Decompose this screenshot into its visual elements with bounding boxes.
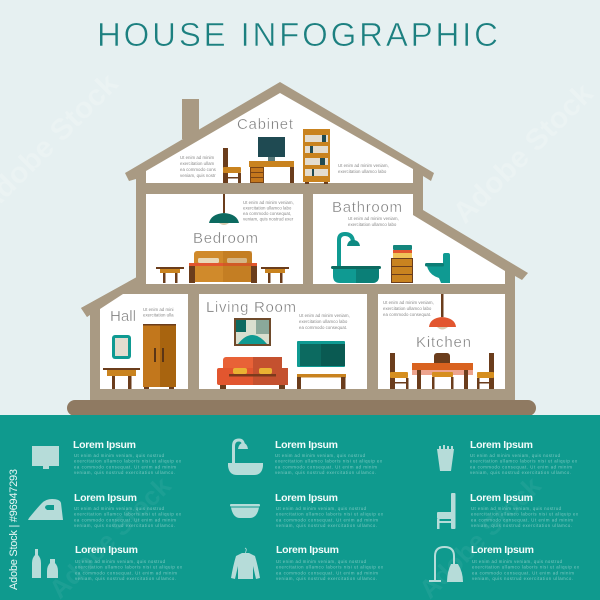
item: col 3 row 3: veniam, quis nostrud exercitation ullamco.	[472, 576, 573, 581]
item: col 3 row 2: Ut enim ad minim veniam, quis nostrud	[471, 506, 562, 511]
caption: kitchen: Ut enim ad minim veniam,	[383, 300, 434, 305]
furniture: kitchen	[390, 294, 494, 389]
room: kitchen interior	[378, 294, 505, 389]
item: col 3 row 2: Lorem Ipsum	[470, 492, 533, 504]
item: col 3 row 3: exercitation ullamco laboris nisi ut aliquip ex	[472, 564, 580, 570]
heading: Kitchen: Kitchen	[416, 334, 471, 351]
item: col 2 row 1: Ut enim ad minim veniam, quis nostrud	[275, 453, 366, 458]
room: hall interior	[100, 294, 188, 389]
item: col 2 row 1: exercitation ullamco laboris nisi ut aliquip ex	[275, 458, 383, 464]
bed	[189, 251, 257, 283]
heading: Bathroom: Bathroom	[332, 199, 402, 216]
left chair	[390, 353, 408, 389]
caption: living room: ea commodo consequat.	[299, 325, 347, 330]
caption: bedroom: veniam, quis nostrud exer	[243, 216, 294, 222]
caption: kitchen: exercitation ullamco labo	[383, 306, 432, 311]
caption: cabinet right: Ut enim ad minim veniam,	[338, 163, 389, 168]
title: HOUSE INFOGRAPHIC	[97, 16, 498, 53]
item: col 2 row 2: ea commodo consequat. Ut enim ad minim	[276, 518, 378, 522]
pendant lamp	[429, 294, 456, 330]
caption: cabinet left: Ut enim ad minim	[180, 155, 215, 160]
foreground watermark	[43, 470, 547, 600]
icon: shower basin	[228, 440, 263, 475]
icon: vacuum cleaner	[429, 547, 463, 582]
item: col 1 row 2: exercitation ullamco laboris nisi ut aliquip ex	[74, 512, 182, 516]
toilet	[425, 253, 450, 283]
left nightstand	[156, 267, 184, 283]
room: bedroom interior	[146, 194, 303, 284]
teal footer panel	[0, 415, 600, 600]
item: col 1 row 3: Lorem Ipsum	[75, 544, 138, 556]
right nightstand	[261, 267, 289, 283]
item: col 3 row 3: ea commodo consequat. Ut enim ad minim	[472, 570, 574, 576]
item: col 3 row 3: Ut enim ad minim veniam, quis nostrud	[472, 559, 563, 564]
caption: bathroom: exercitation ullamco labo	[348, 222, 397, 227]
caption: cabinet left: ea commodo cons	[180, 167, 217, 172]
item: col 2 row 1: ea commodo consequat. Ut enim ad minim	[275, 464, 377, 470]
item: col 1 row 3	[75, 544, 183, 581]
mirror	[112, 335, 131, 359]
furniture: bedroom	[156, 194, 289, 283]
caption: bedroom: exercitation ullamco labo	[243, 206, 292, 210]
item: col 1 row 3: exercitation ullamco laboris nisi ut aliquip ex	[75, 564, 183, 570]
item: col 2 row 3: exercitation ullamco laboris nisi ut aliquip ex	[276, 564, 384, 570]
caption: cabinet left: veniam, quis nostr	[180, 173, 216, 178]
item: col 2 row 1: Lorem Ipsum	[275, 439, 338, 451]
item: col 1 row 2: Ut enim ad minim veniam, quis nostrud	[74, 506, 165, 511]
icon: monitor	[32, 446, 59, 469]
television	[297, 341, 345, 367]
chimney	[182, 99, 199, 139]
item: col 2 row 3: ea commodo consequat. Ut enim ad minim	[276, 570, 378, 576]
item: col 2 row 1: veniam, quis nostrud exercitation ullamco.	[275, 470, 376, 475]
wardrobe	[143, 324, 176, 389]
caption: living room: Ut enim ad minim veniam,	[299, 313, 350, 318]
item: col 1 row 3: ea commodo consequat. Ut enim ad minim	[75, 570, 177, 576]
desk	[249, 161, 294, 183]
item: col 3 row 2: veniam, quis nostrud exercitation ullamco.	[471, 523, 572, 528]
heading: Bedroom: Bedroom	[193, 230, 258, 247]
item: col 1 row 2: ea commodo consequat. Ut enim ad minim	[74, 518, 176, 522]
item: col 2 row 3: Lorem Ipsum	[276, 544, 339, 556]
house structure	[67, 82, 536, 416]
framed painting	[234, 318, 271, 346]
item: col 1 row 3: veniam, quis nostrud exercitation ullamco.	[75, 576, 176, 581]
icon: fries	[437, 445, 454, 471]
item: col 2 row 2: veniam, quis nostrud exercitation ullamco.	[276, 523, 377, 528]
item: col 1 row 1: veniam, quis nostrud exercitation ullamco.	[74, 470, 175, 475]
watermark text: Adobe Stock	[447, 77, 600, 230]
heading: Living Room: Living Room	[206, 299, 296, 316]
item: col 3 row 1: Lorem Ipsum	[470, 439, 533, 451]
caption: hall: exercitation ulla	[143, 312, 174, 318]
monitor	[258, 137, 285, 161]
item: col 1 row 1: Lorem Ipsum	[73, 439, 136, 451]
foundation	[67, 400, 536, 416]
item: col 2 row 2: exercitation ullamco laboris nisi ut aliquip ex	[276, 512, 384, 516]
tv table	[297, 374, 346, 389]
item: col 1 row 2	[74, 492, 182, 528]
item: col 1 row 1: ea commodo consequat. Ut enim ad minim	[74, 464, 176, 470]
item: col 2 row 2	[275, 492, 384, 528]
furniture: living room	[217, 318, 346, 389]
dining table	[412, 353, 473, 389]
pendant lamp	[209, 194, 239, 225]
caption: cabinet right: exercitation ullamco labo	[338, 169, 387, 174]
caption: hall: Ut enim ad mini	[143, 307, 174, 312]
icon: iron	[28, 499, 63, 520]
icon: bowl	[230, 504, 260, 518]
room captions	[143, 155, 434, 330]
item: col 3 row 1: veniam, quis nostrud exercitation ullamco.	[470, 470, 571, 475]
item: col 2 row 3: Ut enim ad minim veniam, quis nostrud	[276, 559, 367, 564]
item: col 3 row 3	[471, 544, 580, 581]
caption: bedroom: ea commodo consequat,	[243, 211, 291, 216]
room: bathroom interior	[313, 194, 505, 284]
item: col 2 row 1	[275, 439, 383, 475]
stock id: Adobe Stock | #96947293	[8, 469, 20, 590]
furniture: bathroom	[331, 234, 450, 283]
icon: sweater on hanger	[231, 548, 260, 579]
caption: cabinet left: exercitation ullam	[180, 161, 215, 166]
furniture: cabinet room	[223, 129, 330, 184]
item: col 3 row 1: ea commodo consequat. Ut enim ad minim	[470, 464, 572, 470]
item: col 1 row 2: veniam, quis nostrud exercitation ullamco.	[74, 523, 175, 528]
caption: living room: exercitation ullamco labo	[299, 319, 348, 324]
sofa	[217, 357, 288, 389]
item: col 3 row 1	[470, 439, 578, 475]
room: cabinet interior	[146, 93, 413, 183]
item: col 2 row 2: Lorem Ipsum	[275, 492, 338, 504]
room: living room interior	[199, 294, 367, 389]
watermark text	[0, 67, 600, 230]
chair	[223, 148, 241, 183]
item: col 2 row 3: veniam, quis nostrud exercitation ullamco.	[276, 576, 377, 581]
item: col 1 row 1: exercitation ullamco laboris nisi ut aliquip ex	[74, 458, 182, 464]
icon: chair	[437, 493, 456, 529]
item: col 1 row 3: Ut enim ad minim veniam, quis nostrud	[75, 559, 166, 564]
item: col 1 row 2: Lorem Ipsum	[74, 492, 137, 504]
heading: Hall: Hall	[110, 308, 136, 325]
item: col 3 row 2	[470, 492, 579, 528]
room labels	[110, 116, 471, 351]
caption: bedroom: Ut enim ad minim veniam,	[243, 200, 294, 205]
console table	[103, 368, 140, 389]
furniture: hall	[103, 324, 176, 389]
item: col 3 row 2: ea commodo consequat. Ut enim ad minim	[471, 518, 573, 522]
caption: kitchen: ea commodo consequat.	[383, 312, 431, 317]
item: col 2 row 3	[276, 544, 384, 581]
item: col 3 row 1: Ut enim ad minim veniam, quis nostrud	[470, 453, 561, 458]
item: col 3 row 2: exercitation ullamco laboris nisi ut aliquip ex	[471, 512, 579, 516]
heading: Cabinet: Cabinet	[237, 116, 294, 133]
item: col 1 row 1	[73, 439, 182, 475]
item: col 2 row 2: Ut enim ad minim veniam, quis nostrud	[276, 506, 367, 511]
house shell	[81, 82, 528, 400]
right chair	[477, 353, 494, 389]
item: col 3 row 1: exercitation ullamco laboris nisi ut aliquip ex	[470, 458, 578, 464]
caption: bathroom: Ut enim ad minim veniam,	[348, 216, 399, 221]
towels and drawers	[391, 245, 413, 283]
item: col 1 row 1: Ut enim ad minim veniam, quis nostrud	[74, 453, 165, 458]
item: col 3 row 3: Lorem Ipsum	[471, 544, 534, 556]
icon: bottles	[32, 549, 58, 578]
bathtub with shower	[331, 234, 381, 283]
bookcase	[303, 129, 330, 184]
